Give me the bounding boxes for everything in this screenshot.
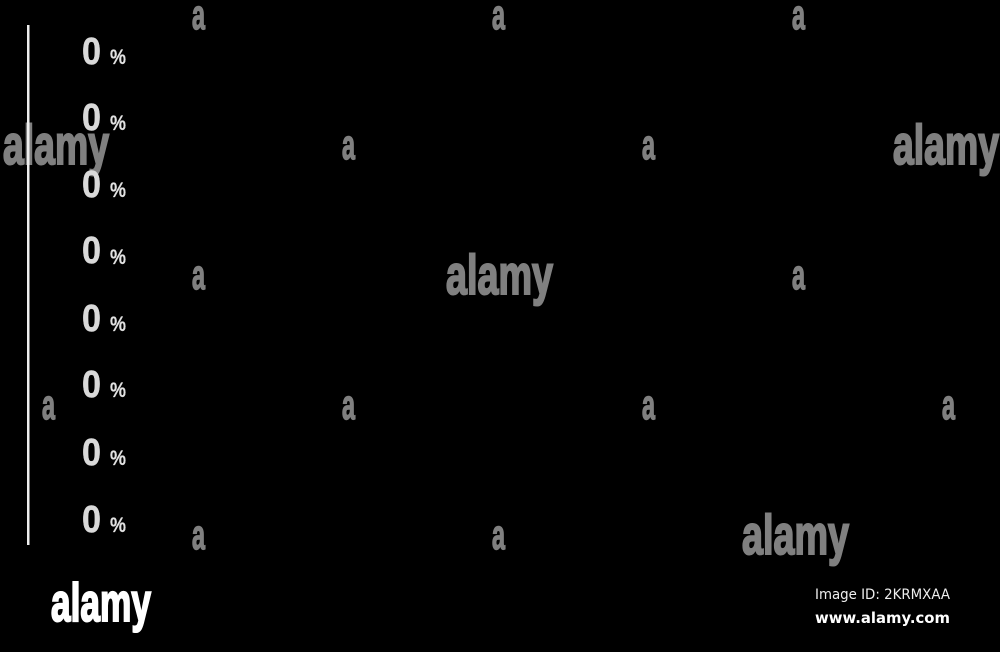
percentage labels: % bbox=[110, 46, 126, 69]
percentage labels: 0 bbox=[82, 364, 101, 406]
percentage labels: % bbox=[110, 179, 126, 202]
watermarks: small a glyphs: a bbox=[342, 121, 355, 168]
percentage labels: 0 bbox=[82, 230, 101, 272]
watermarks: small a glyphs: a bbox=[192, 511, 205, 558]
percentage labels: 0 bbox=[82, 432, 101, 474]
watermarks: small a glyphs: a bbox=[642, 381, 655, 428]
watermarks: large alamy: alamy bbox=[3, 113, 109, 176]
percentage labels: 0 bbox=[82, 31, 101, 73]
watermarks: large alamy: alamy bbox=[742, 503, 849, 566]
watermarks: small a glyphs: a bbox=[492, 511, 505, 558]
watermarks: large alamy: alamy bbox=[446, 243, 553, 306]
percentage labels: % bbox=[110, 447, 126, 470]
percentage labels: 0 bbox=[82, 298, 101, 340]
percentage labels: % bbox=[110, 313, 126, 336]
watermarks: small a glyphs: a bbox=[342, 381, 355, 428]
percentage labels: 0 bbox=[82, 499, 101, 541]
percentage labels: % bbox=[110, 246, 126, 269]
alamy logo: alamy bbox=[51, 573, 151, 633]
watermarks: small a glyphs: a bbox=[42, 381, 55, 428]
percentage labels: 0 bbox=[82, 97, 101, 139]
watermarks: small a glyphs: a bbox=[192, 251, 205, 298]
percentage labels bbox=[82, 31, 126, 541]
percentage labels: % bbox=[110, 514, 126, 537]
watermarks: small a glyphs: a bbox=[792, 251, 805, 298]
watermarks: large alamy bbox=[3, 113, 999, 566]
watermarks: small a glyphs: a bbox=[642, 121, 655, 168]
percentage labels: % bbox=[110, 112, 126, 135]
watermarks: small a glyphs: a bbox=[942, 381, 955, 428]
vertical axis line bbox=[27, 25, 30, 545]
percentage labels: % bbox=[110, 379, 126, 402]
image id text: Image ID: 2KRMXAA bbox=[815, 587, 950, 603]
watermarks: small a glyphs bbox=[42, 0, 955, 558]
percentage labels: 0 bbox=[82, 164, 101, 206]
website url: www.alamy.com bbox=[815, 609, 950, 627]
